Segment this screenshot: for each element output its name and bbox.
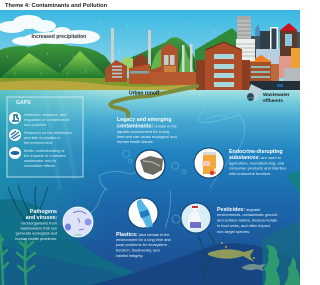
water (0, 90, 300, 285)
icon: plastics research (9, 129, 21, 141)
icon: pesticide spray circle (181, 203, 211, 233)
sunlit water ripples (88, 92, 290, 228)
mountains (0, 28, 250, 82)
icon: wastewater (9, 147, 21, 159)
main brick building (196, 42, 250, 90)
gap text: detection: Detection, research, and (24, 112, 66, 117)
text: endocrine-disrupting substances: with endocrine function. (229, 171, 271, 176)
dark kelp (8, 185, 215, 285)
text: endocrine-disrupting substances: consumer products and interfere (229, 166, 287, 170)
gap text: plastics research: and fate of plastics in (24, 135, 61, 140)
text: plastics: environment for a long time and (116, 237, 171, 242)
icon: plastic bottle circle (128, 198, 158, 228)
text: legacy and emerging contaminants: aquatic environment for a long (117, 129, 169, 134)
text: endocrine-disrupting substances: are used in (260, 155, 281, 160)
text: plastics: habitat integrity. (116, 253, 143, 258)
urban runoff stream (110, 86, 197, 116)
wastewater pipe (247, 84, 263, 101)
gaps heading: GAPS (16, 100, 31, 106)
text: endocrine-disrupting substances: agriculture, manufacturing, and (229, 160, 284, 166)
text: pathogens and viruses: human health problems. (15, 236, 57, 241)
label: increased precipitation: Increased precipitation (32, 34, 86, 40)
label: urban runoff: Urban runoff (129, 90, 160, 96)
text: endocrine-disrupting substances: substances: (229, 155, 260, 161)
gap text: plastics research: the environment (24, 140, 53, 145)
title: Theme 4: Contaminants and Pollution (5, 3, 108, 9)
text: plastics: pose problems for ecosystem (116, 242, 167, 247)
city skyline (249, 23, 300, 82)
text: endocrine-disrupting substances: Endocrine-disrupting (229, 149, 283, 155)
text: pesticides: Pesticides: (217, 207, 245, 213)
gap text: wastewater: cumulative effects (24, 163, 55, 168)
text: legacy and emerging contaminants: Legacy and emerging (117, 117, 171, 123)
text: pesticides: and surface waters, bioaccumulate (217, 218, 277, 222)
text: plastics: Plastics: (116, 232, 138, 238)
text: legacy and emerging contaminants: contaminants: (117, 124, 153, 130)
icon: microbes circle (63, 207, 93, 237)
seabed hills (0, 170, 300, 285)
text: legacy and emerging contaminants: remain in the (153, 124, 177, 128)
gap text: wastewater: wastewater and its (24, 158, 56, 163)
factories (105, 28, 196, 85)
clouds: increased precipitation (0, 15, 100, 46)
icon: rock contaminant circle (135, 150, 165, 180)
ground strip (0, 78, 198, 90)
dark quay wall (250, 81, 300, 90)
green seaweed left (0, 235, 35, 285)
gap text: plastics research: Research on the distribution (24, 130, 72, 135)
text: pathogens and viruses: microorganisms from (21, 220, 57, 226)
gap text: detection: and pollution (24, 122, 46, 127)
text: legacy and emerging contaminants: human health issues. (117, 139, 154, 144)
gap text: wastewater: the impacts of untreated (24, 153, 66, 158)
text: pathogens and viruses: and viruses: (26, 215, 57, 221)
text: pathogens and viruses: wastewaters that can (20, 226, 57, 230)
grey tower (236, 16, 255, 61)
background: white title band (0, 0, 300, 11)
text: pathogens and viruses: generate ecological and (16, 230, 57, 236)
panel: gaps (7, 97, 83, 177)
icon: endocrine disruptor bottle circle (194, 148, 224, 178)
rain streaks (7, 20, 215, 75)
gap text: detection: regulation of contaminants (24, 117, 70, 122)
gap text: wastewater: Better understanding of (24, 148, 65, 153)
text: pathogens and viruses: Pathogens (30, 209, 57, 215)
green seaweed right (264, 245, 300, 285)
text: pesticides: in food webs, and often impact (217, 223, 271, 228)
text: pesticides: degrade (245, 207, 260, 212)
icon: detection (9, 112, 21, 124)
sky (0, 10, 300, 92)
label: wastewater effluents: effluents (263, 98, 283, 104)
text: plastics: function, biodiversity, and (116, 248, 160, 252)
text: pesticides: non-target species. (217, 229, 250, 234)
text: plastics: also remain in the (138, 232, 170, 237)
label: wastewater effluents: Wastewater (263, 92, 290, 98)
text: legacy and emerging contaminants: time and can cause ecological and (117, 134, 177, 139)
text: pesticides: environments, contaminate ground (217, 212, 277, 217)
fish (208, 242, 266, 271)
